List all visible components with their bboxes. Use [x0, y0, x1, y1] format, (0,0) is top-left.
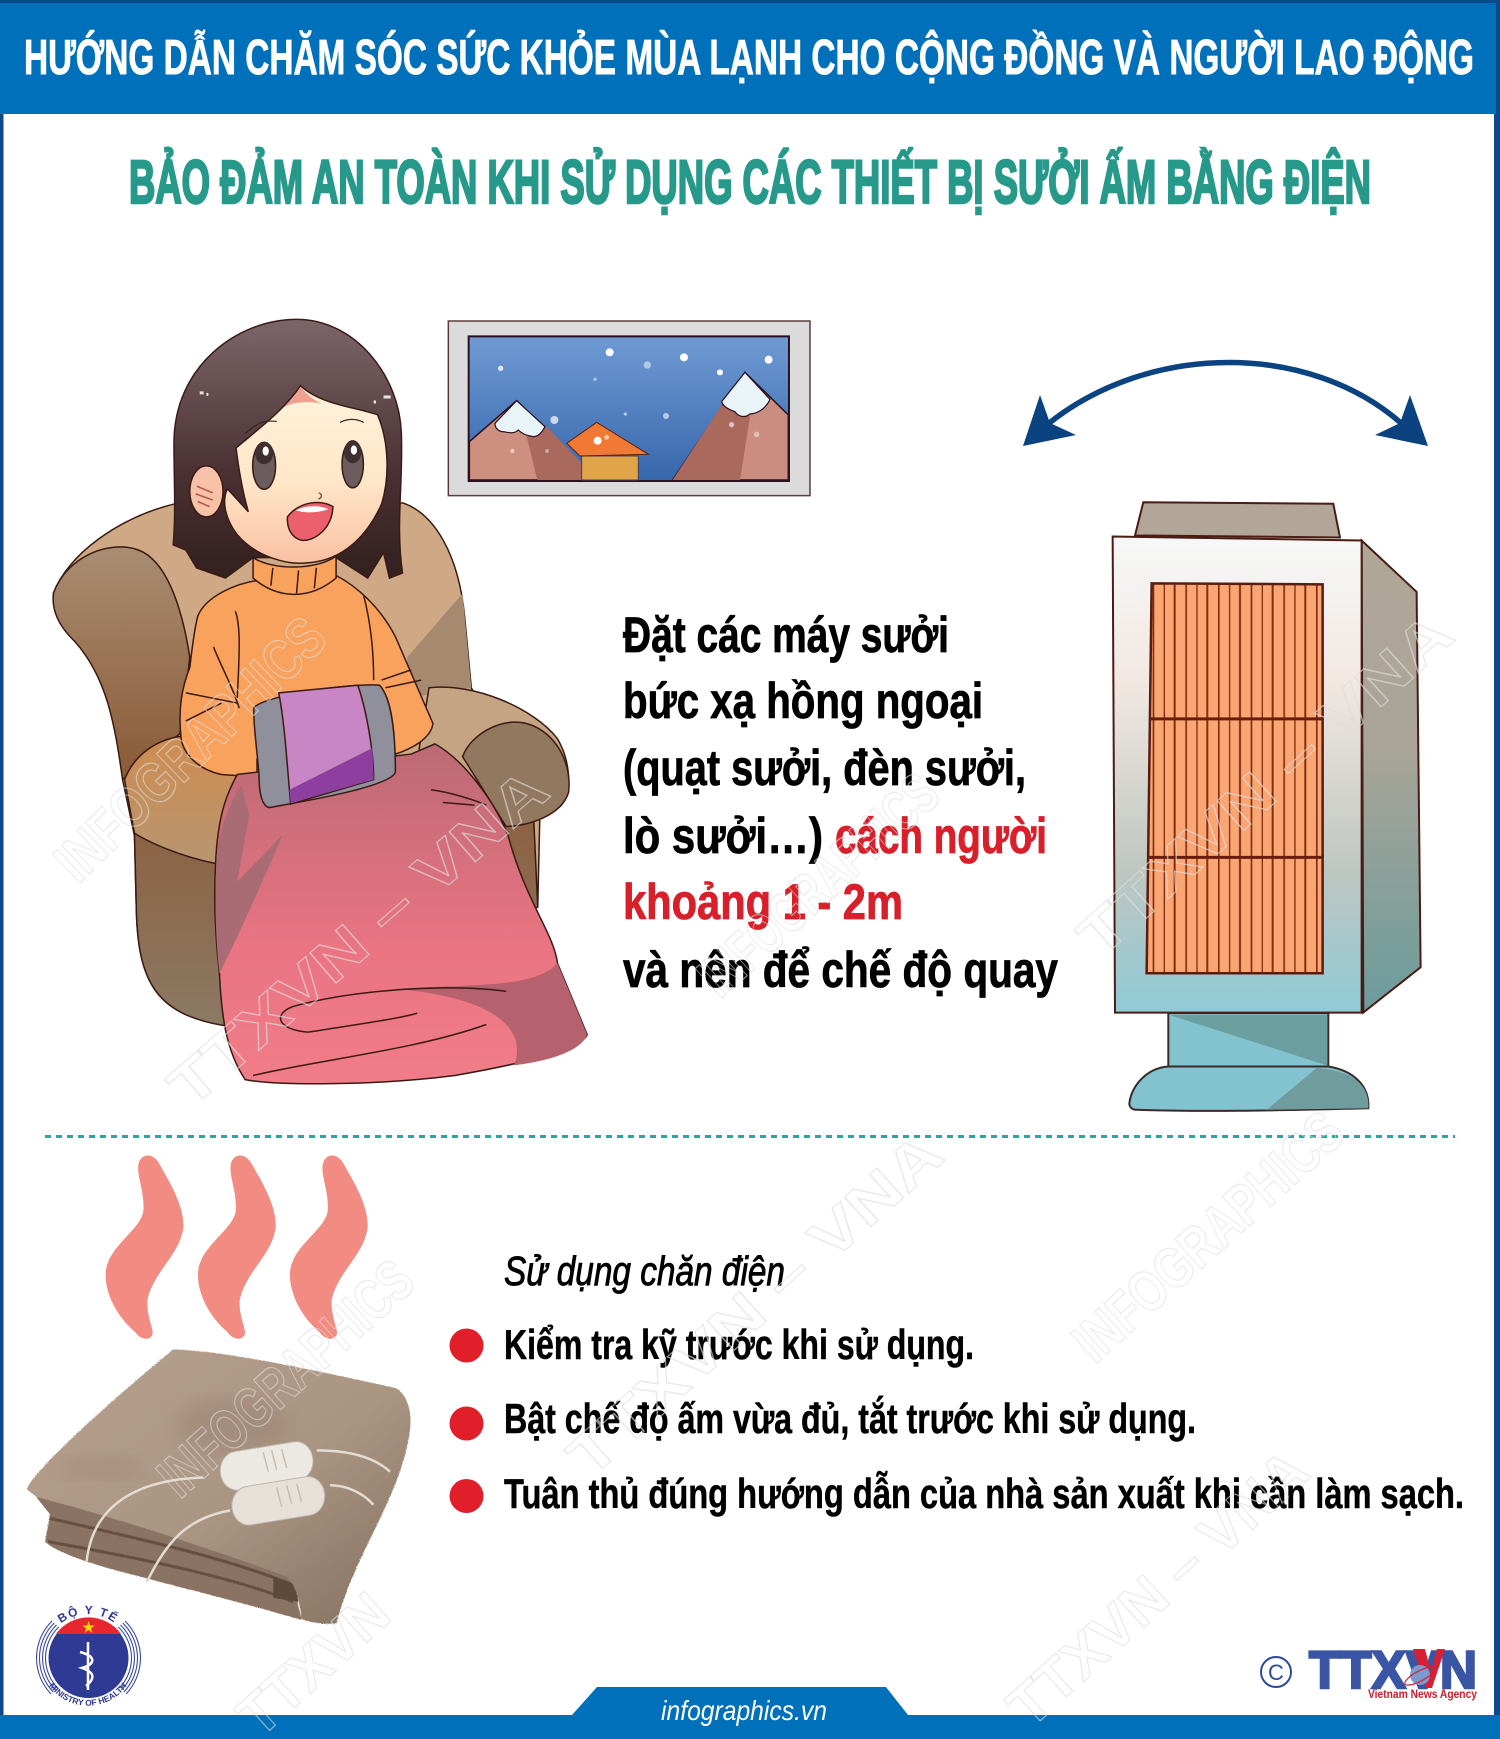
bullet list: electric blanket [450, 1248, 1464, 1517]
logo: TTXVN Vietnam News Agency: TTXVN [1309, 1641, 1477, 1700]
body text: infrared heater advice: (quạt sưởi, đèn sưởi, [623, 740, 1026, 796]
blanket cables [87, 1450, 390, 1582]
watermarks: TTXVN – VNA [995, 1437, 1321, 1739]
bullet 2: Bật chế độ ấm vừa đủ, tắt trước khi sử dụng. [504, 1394, 1196, 1442]
watermarks: INFOGRAPHICS [1060, 1099, 1356, 1375]
header band [0, 0, 1500, 114]
snowflakes [498, 348, 773, 453]
right mountain [673, 372, 788, 480]
heater front [1113, 536, 1362, 1013]
watermarks: INFOGRAPHICS [42, 604, 339, 894]
watermarks [42, 600, 1465, 1739]
hair [173, 319, 403, 578]
watermarks: INFOGRAPHICS [145, 1247, 427, 1510]
photo: electric blanket [27, 1349, 410, 1624]
body text: infrared heater advice: lò sưởi…) [623, 808, 823, 864]
heater top [1135, 502, 1340, 537]
hand warmer muff [254, 685, 395, 808]
remote controls [218, 1439, 327, 1528]
base [1129, 1066, 1368, 1111]
bullet 1: Kiểm tra kỹ trước khi sử dụng. [504, 1321, 974, 1368]
body text: infrared heater advice: và nên để chế độ quay [623, 942, 1058, 998]
wall picture: snowy mountains [448, 321, 810, 496]
watermarks: INFOGRAPHICS [685, 761, 952, 1010]
heater side [1362, 541, 1421, 1013]
logo: TTXVN Vietnam News Agency: Vietnam News Agency [1368, 1689, 1478, 1701]
body text: infrared heater advice: cách người [835, 808, 1047, 864]
watermarks: TTXVN – VNA [156, 756, 561, 1120]
list heading: Sử dụng chăn điện [504, 1248, 785, 1294]
illustration: woman in armchair [53, 319, 587, 1084]
dotted divider [45, 1135, 1455, 1138]
body text: infrared heater advice: bức xạ hồng ngoại [623, 673, 983, 729]
illustration: infrared heater [1113, 502, 1421, 1111]
logo: Ministry of Health: MINISTRY OF HEALTH [49, 1682, 127, 1706]
blanket over lap [215, 744, 587, 1084]
watermarks: TTXVN – VNA [555, 1120, 955, 1490]
blanket top surface [27, 1349, 410, 1624]
arrow: rotate both ways [1023, 362, 1428, 446]
watermarks: TTXVN – VNA [1065, 600, 1465, 970]
heating grille [1147, 583, 1323, 973]
body text: infrared heater advice: khoảng 1 - 2m [623, 874, 903, 930]
logo: TTXVN Vietnam News Agency: C [1268, 1660, 1284, 1685]
footer bar with tab [0, 1687, 1500, 1739]
website url: infographics.vn [661, 1695, 827, 1726]
logo: Ministry of Health: BỘ Y TẾ [57, 1606, 119, 1623]
stand [1168, 1013, 1328, 1066]
folded layers [32, 1491, 302, 1620]
body text: infrared heater advice [623, 607, 1058, 998]
sweater [180, 556, 433, 777]
house [567, 422, 648, 480]
logo: Ministry of Health [36, 1606, 141, 1706]
left mountain [469, 401, 598, 480]
armchair [53, 503, 569, 1026]
face [190, 386, 391, 563]
body text: infrared heater advice: Đặt các máy sưởi [623, 607, 949, 663]
icon: heat waves [106, 1155, 368, 1339]
